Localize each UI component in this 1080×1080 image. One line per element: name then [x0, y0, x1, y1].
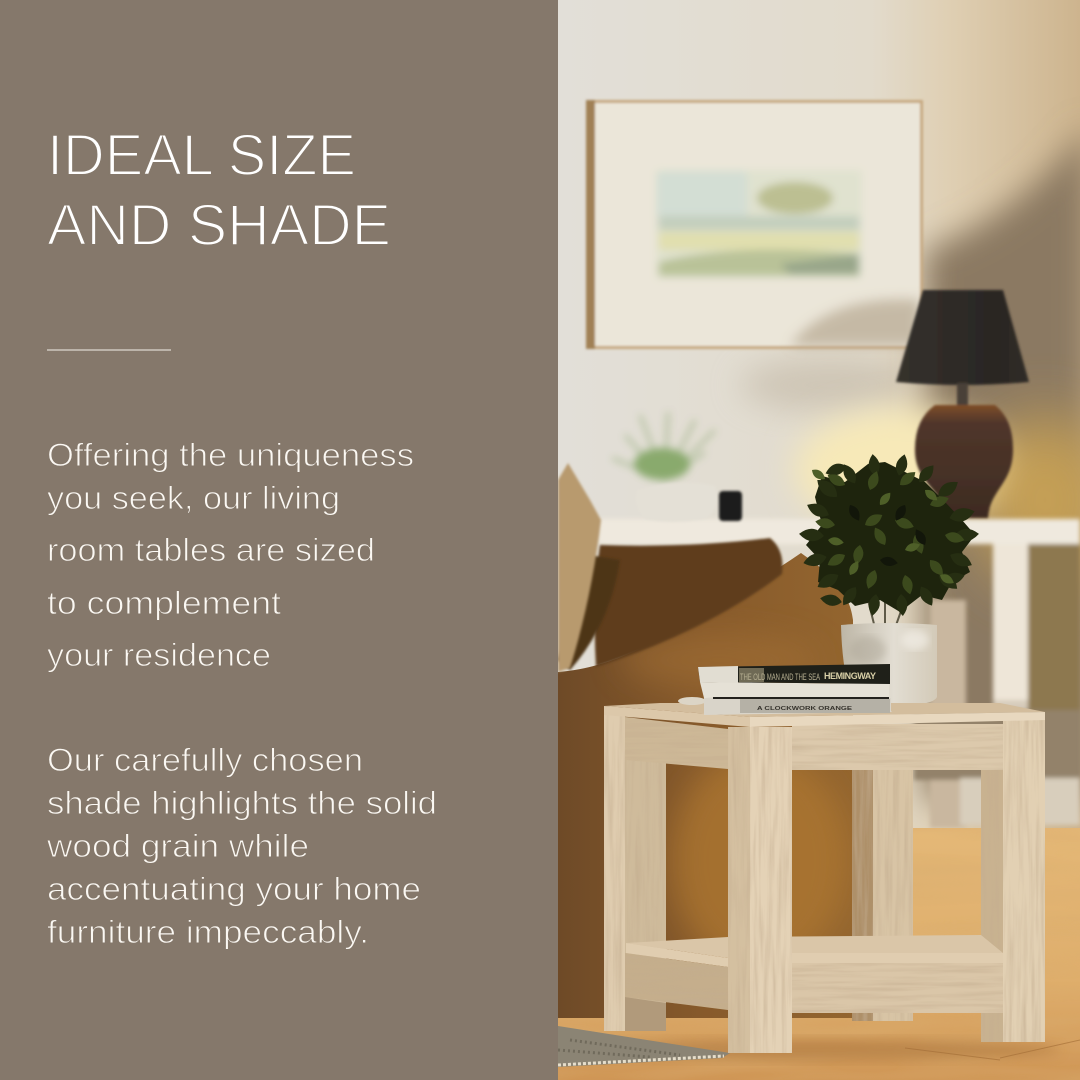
lower shelf left apron [625, 953, 728, 1010]
stack of books [678, 664, 892, 715]
top book: THE OLD MAN AND THE SEA [740, 672, 820, 682]
framed landscape art [586, 100, 923, 349]
paragraph: shade: wood grain while [46, 828, 309, 864]
side table [604, 703, 1045, 1053]
paragraph: shade: shade highlights the solid [47, 785, 437, 821]
sofa pillow beige [558, 463, 601, 672]
wall background [558, 0, 1080, 840]
top book: HEMINGWAY [824, 671, 876, 681]
paragraph: uniqueness: your residence [47, 637, 271, 673]
rug [558, 1026, 730, 1067]
back left leg [625, 755, 666, 1031]
title: IDEAL SIZE [47, 123, 356, 188]
console table in background [598, 519, 1080, 828]
upper left apron [625, 717, 728, 769]
landscape painting [656, 170, 862, 278]
top book [698, 664, 890, 684]
paragraph: shade: Our carefully chosen [47, 742, 363, 778]
divider [47, 350, 171, 351]
paragraph: uniqueness: Offering the uniqueness [47, 437, 414, 473]
title: AND SHADE [47, 193, 391, 258]
marble pot [841, 623, 937, 706]
paragraph: shade: accentuating your home [47, 871, 421, 907]
paragraph: uniqueness: room tables are sized [47, 532, 375, 568]
paragraph: uniqueness: to complement [47, 585, 281, 621]
right leg inner face [981, 765, 1003, 1042]
bottom book: A CLOCKWORK ORANGE [757, 706, 852, 712]
right leg [1003, 720, 1045, 1042]
panel: text on taupe background [46, 123, 437, 950]
background plant in white bowl [612, 412, 742, 522]
back leg [852, 765, 913, 1021]
lower shelf front edge [626, 943, 1003, 967]
paragraph: shade: furniture impeccably. [47, 914, 369, 950]
floor [558, 828, 1080, 1080]
lower shelf front apron [792, 963, 1003, 1013]
sofa pillow brown [595, 538, 782, 667]
paragraph: shade [46, 742, 437, 950]
foliage [799, 453, 979, 617]
table top [604, 703, 1045, 727]
bottom book [704, 698, 892, 715]
paragraph: uniqueness [47, 437, 414, 673]
middle book [700, 682, 889, 699]
left leg [604, 715, 625, 1031]
front corner leg [728, 727, 792, 1053]
plant stem [868, 590, 905, 630]
sofa [558, 463, 853, 1018]
photo scene: living room with side table [558, 0, 1080, 1080]
title [47, 123, 391, 258]
table lamp [896, 290, 1029, 518]
potted topiary plant [799, 453, 979, 706]
lower shelf top [626, 935, 1003, 958]
paragraph: uniqueness: you seek, our living [47, 480, 340, 516]
upper front apron [792, 724, 1003, 770]
